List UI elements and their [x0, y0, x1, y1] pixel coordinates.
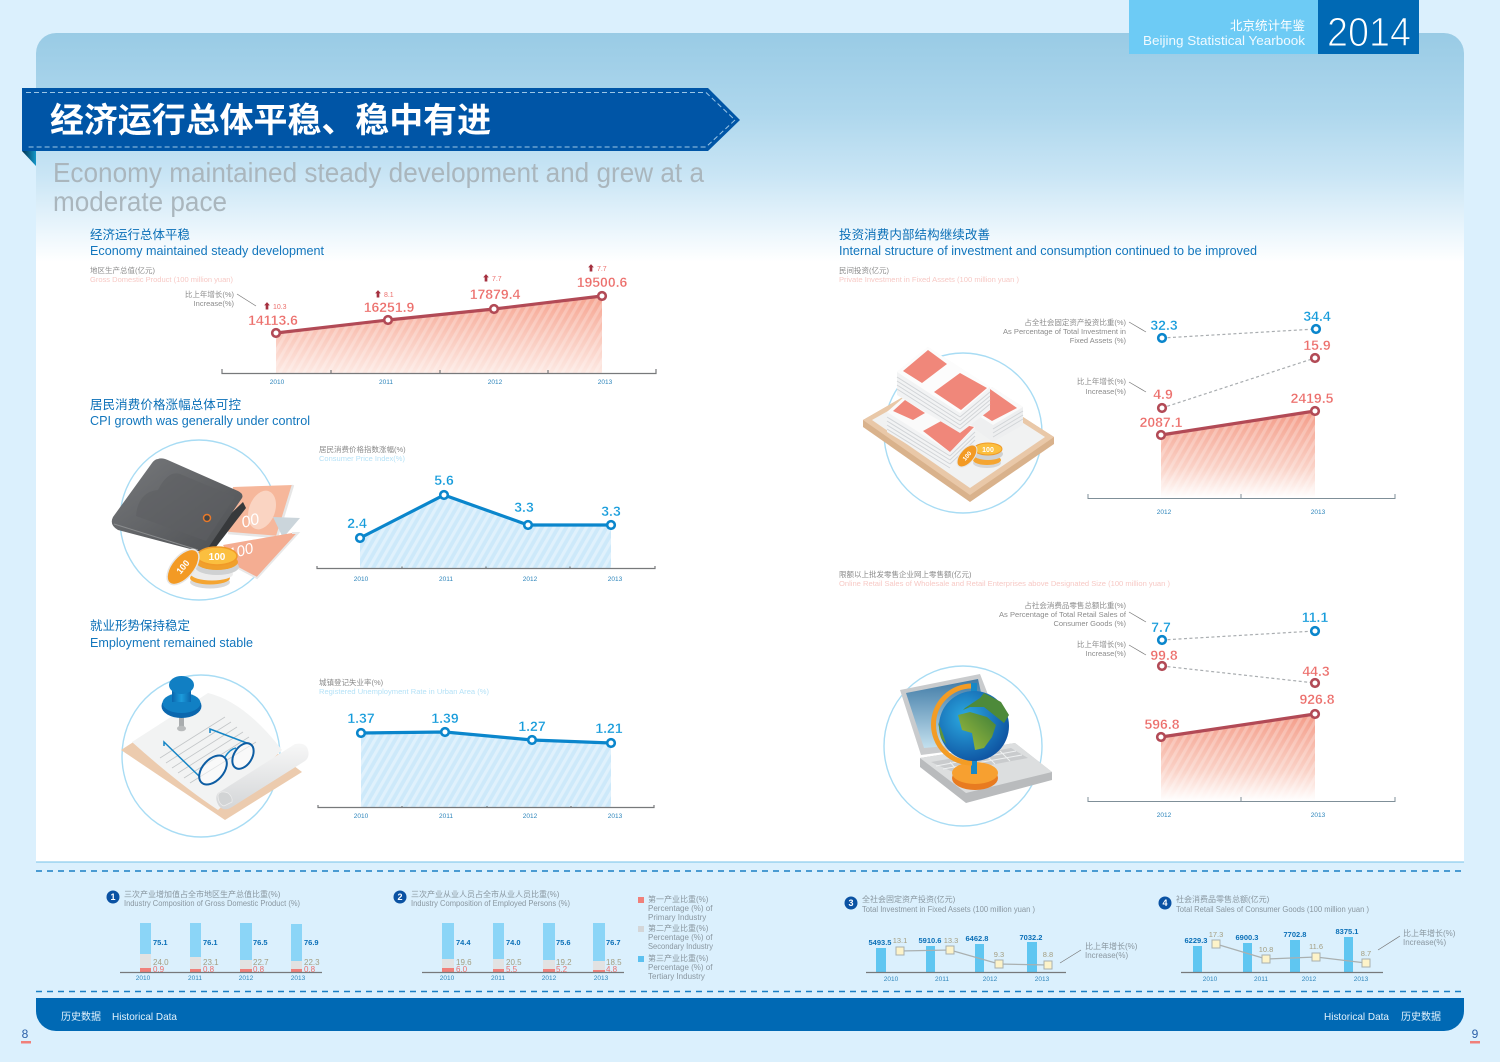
panel: GDP	[90, 227, 656, 386]
area chart: CPI: 2011	[439, 576, 453, 583]
area chart: GDP: 2013	[598, 379, 613, 386]
chart caption: CPI: Consumer Price Index(%)	[319, 454, 405, 463]
chart caption: CPI	[319, 444, 406, 463]
stacked bars: GDP composition: 24.0	[153, 958, 169, 967]
legend: industry composition: Percentage (%) of	[648, 933, 713, 942]
combined chart: private investment: As Percentage of Total Investment in	[1003, 327, 1126, 336]
stacked bars: employment composition: 76.7	[606, 938, 621, 947]
combined chart: private investment: 32.3	[1150, 317, 1178, 333]
footer bar	[36, 998, 1464, 1031]
area chart: CPI: 2013	[608, 576, 623, 583]
combined chart: private investment: 34.4	[1303, 308, 1331, 324]
bar and line chart: fixed assets investment: 5910.6	[919, 936, 941, 945]
bar and line chart: retail sales: Total Retail Sales of Consumer Goods (100 million yuan )	[1176, 905, 1369, 914]
combined chart: private investment: Fixed Assets (%)	[1070, 336, 1127, 345]
stacked bars: employment composition	[394, 889, 624, 982]
bar and line chart: retail sales: 11.6	[1309, 942, 1323, 951]
bar and line chart: fixed assets investment: 2010	[884, 976, 899, 983]
stacked bars: GDP composition: 三次产业增加值占全市地区生产总值比重(%)	[124, 889, 281, 899]
page number 9: 9	[1472, 1027, 1479, 1041]
chart caption: unemployment	[319, 677, 489, 696]
stacked bars: employment composition: 三次产业从业人员占全市从业人员比重(%)	[411, 889, 560, 899]
area chart: GDP	[185, 264, 656, 386]
bar and line chart: retail sales: 2011	[1254, 976, 1268, 983]
panel: online retail sales	[839, 569, 1395, 826]
bar and line chart: fixed assets investment: 7032.2	[1020, 933, 1042, 942]
combined chart: online retail: 11.1	[1302, 609, 1328, 625]
chart caption: online retail: Online Retail Sales of Wholesale and Retail Enterprises above Designated Size (100 million yuan )	[839, 579, 1170, 588]
title banner: 经济运行总体平稳、稳中有进	[50, 102, 491, 140]
legend: industry composition: 第二产业比重(%)	[648, 923, 709, 933]
legend: industry composition: Percentage (%) of	[648, 904, 713, 913]
subtitle: Economy maintained steady development and grew at a	[53, 157, 704, 188]
subtitle: moderate pace	[53, 186, 227, 217]
bar and line chart: fixed assets investment: 2013	[1035, 976, 1050, 983]
icon: banknote bundles on tray	[863, 347, 1054, 513]
chart caption: CPI: 居民消费价格指数涨幅(%)	[319, 444, 406, 454]
bar and line chart: fixed assets investment: 3	[848, 898, 854, 908]
title banner	[22, 88, 740, 166]
heading: GDP: Economy maintained steady development	[90, 243, 324, 258]
bar and line chart: retail sales: 6229.3	[1185, 936, 1207, 945]
area chart: GDP: ⬆ 7.7	[482, 274, 502, 283]
area chart: unemployment: 2010	[354, 813, 369, 820]
footer bar: Historical Data	[112, 1011, 177, 1023]
bar and line chart: fixed assets investment: 9.3	[994, 950, 1004, 959]
yearbook header tab: Beijing Statistical Yearbook	[1143, 33, 1306, 48]
heading: employment: Employment remained stable	[90, 635, 253, 650]
area chart: GDP: 19500.6	[577, 274, 628, 290]
yearbook header tab	[1129, 0, 1419, 55]
area chart: CPI	[317, 472, 655, 583]
icon: pushpin, document and glasses	[121, 675, 309, 837]
area chart: unemployment: 1.27	[518, 718, 546, 734]
bar and line chart: retail sales	[1158, 894, 1456, 983]
heading: employment: 就业形势保持稳定	[90, 618, 190, 633]
area chart: unemployment: 2011	[439, 813, 453, 820]
bar and line chart: fixed assets investment	[844, 894, 1138, 983]
area chart: GDP: 比上年增长(%)	[185, 289, 234, 299]
stacked bars: employment composition: 19.2	[556, 958, 572, 967]
area chart: GDP: ⬆ 8.1	[374, 290, 394, 299]
bar and line chart: retail sales: 2013	[1354, 976, 1369, 983]
area chart: unemployment	[318, 710, 654, 820]
bar and line chart: fixed assets investment: 6462.8	[966, 934, 988, 943]
stacked bars: employment composition: 18.5	[606, 958, 622, 967]
combined chart: private investment: 4.9	[1153, 386, 1173, 402]
stacked bars: employment composition: 75.6	[556, 938, 571, 947]
bar and line chart: retail sales: 8.7	[1361, 949, 1371, 958]
stacked bars: GDP composition: Industry Composition of Gross Domestic Product (%)	[124, 899, 300, 908]
bar and line chart: fixed assets investment: 13.1	[893, 936, 907, 945]
bar and line chart: fixed assets investment: 5493.5	[869, 938, 891, 947]
stacked bars: employment composition: 2	[397, 892, 403, 902]
heading: investment and consumption: Internal structure of investment and consumption continued to be improved	[839, 243, 1257, 258]
bar and line chart: retail sales: 2012	[1302, 976, 1317, 983]
area chart: CPI: 2010	[354, 576, 369, 583]
stacked bars: employment composition: 4.8	[606, 965, 618, 974]
stacked bars: GDP composition: 0.8	[203, 965, 215, 974]
area chart: GDP: 17879.4	[470, 286, 521, 302]
bar and line chart: retail sales: 10.8	[1259, 945, 1273, 954]
footer bar: Historical Data	[1324, 1011, 1389, 1023]
bar and line chart: retail sales: Increase(%)	[1403, 938, 1446, 947]
stacked bars: GDP composition: 2010	[136, 975, 151, 982]
stacked bars: GDP composition: 2013	[291, 975, 306, 982]
stacked bars: employment composition: 20.5	[506, 958, 522, 967]
chart caption: GDP: Gross Domestic Product (100 million yuan)	[90, 275, 233, 284]
stacked bars: employment composition: Industry Composition of Employed Persons (%)	[411, 899, 570, 908]
icon: wallet with banknotes and coins: 100	[209, 552, 226, 563]
chart caption: private investment	[839, 265, 1020, 284]
yearbook header tab: 北京统计年鉴	[1230, 19, 1305, 33]
legend: industry composition: Primary Industry	[648, 913, 706, 922]
combined chart: private investment: Increase(%)	[1086, 387, 1126, 396]
area chart: unemployment: 1.37	[347, 710, 375, 726]
subtitle	[53, 157, 704, 217]
icon: laptop with globe	[884, 666, 1052, 826]
stacked bars: GDP composition: 75.1	[153, 938, 168, 947]
stacked bars: GDP composition: 22.3	[304, 958, 320, 967]
icon: wallet with banknotes and coins: 00	[240, 511, 261, 532]
heading: employment	[90, 618, 253, 650]
icon: wallet with banknotes and coins: 100	[227, 540, 256, 563]
legend: industry composition	[638, 894, 713, 981]
stacked bars: employment composition: 74.0	[506, 938, 521, 947]
bar and line chart: fixed assets investment: Increase(%)	[1085, 951, 1128, 960]
combined chart: online retail	[999, 600, 1395, 819]
combined chart: private investment: 2013	[1311, 509, 1326, 516]
combined chart: private investment: 比上年增长(%)	[1077, 376, 1126, 386]
stacked bars: GDP composition	[106, 889, 322, 982]
combined chart: online retail: 926.8	[1299, 691, 1335, 707]
panel: CPI	[90, 397, 655, 600]
combined chart: online retail: 2012	[1157, 812, 1172, 819]
icon: banknote bundles on tray: 100	[962, 450, 974, 462]
chart caption: online retail	[839, 569, 1170, 588]
stacked bars: GDP composition: 0.8	[304, 965, 316, 974]
combined chart: online retail: 7.7	[1151, 619, 1171, 635]
yearbook header tab: 2014	[1327, 9, 1411, 55]
stacked bars: GDP composition: 76.1	[203, 938, 218, 947]
stacked bars: GDP composition: 76.9	[304, 938, 319, 947]
panel: private investment	[839, 227, 1395, 516]
bar and line chart: fixed assets investment: 比上年增长(%)	[1085, 941, 1138, 951]
chart caption: online retail: 限额以上批发零售企业网上零售额(亿元)	[839, 569, 972, 579]
panel: employment	[90, 618, 654, 837]
bar and line chart: retail sales: 7702.8	[1284, 930, 1306, 939]
bar and line chart: retail sales: 4	[1162, 898, 1168, 908]
chart caption: unemployment: 城镇登记失业率(%)	[319, 677, 384, 687]
combined chart: online retail: 44.3	[1302, 663, 1330, 679]
bar and line chart: retail sales: 比上年增长(%)	[1403, 928, 1456, 938]
bar and line chart: fixed assets investment: Total Investment in Fixed Assets (100 million yuan )	[862, 905, 1035, 914]
area chart: GDP: 16251.9	[364, 299, 415, 315]
area chart: GDP: Increase(%)	[194, 299, 234, 308]
area chart: unemployment: 2012	[523, 813, 538, 820]
heading: CPI	[90, 397, 310, 428]
bar and line chart: fixed assets investment: 全社会固定资产投资(亿元)	[862, 894, 956, 904]
bar and line chart: retail sales: 8375.1	[1336, 927, 1358, 936]
stacked bars: employment composition: 2012	[542, 975, 557, 982]
bar and line chart: retail sales: 17.3	[1209, 930, 1223, 939]
combined chart: private investment: 15.9	[1303, 337, 1331, 353]
heading: CPI: 居民消费价格涨幅总体可控	[90, 397, 241, 412]
stacked bars: GDP composition: 22.7	[253, 958, 269, 967]
stacked bars: GDP composition: 0.8	[253, 965, 265, 974]
area chart: GDP: 2012	[488, 379, 503, 386]
legend: industry composition: Percentage (%) of	[648, 963, 713, 972]
stacked bars: employment composition: 74.4	[456, 938, 471, 947]
combined chart: private investment: 占全社会固定资产投资比重(%)	[1024, 317, 1126, 327]
bar and line chart: retail sales: 社会消费品零售总额(亿元)	[1176, 894, 1270, 904]
page number 8: 8	[22, 1027, 29, 1041]
footer bar: 历史数据	[61, 1010, 101, 1023]
combined chart: online retail: 比上年增长(%)	[1077, 639, 1126, 649]
stacked bars: GDP composition: 23.1	[203, 958, 219, 967]
bar and line chart: fixed assets investment: 13.3	[944, 936, 958, 945]
combined chart: online retail: 99.8	[1150, 647, 1178, 663]
stacked bars: GDP composition: 2011	[188, 975, 202, 982]
stacked bars: GDP composition: 76.5	[253, 938, 268, 947]
combined chart: online retail: 占社会消费品零售总额比重(%)	[1024, 600, 1126, 610]
heading: GDP: 经济运行总体平稳	[90, 227, 190, 242]
area chart: GDP: 14113.6	[248, 312, 298, 328]
chart caption: GDP	[90, 265, 233, 284]
bar and line chart: retail sales: 2010	[1203, 976, 1218, 983]
stacked bars: employment composition: 5.5	[506, 965, 518, 974]
legend: industry composition: Secondary Industry	[648, 942, 713, 951]
combined chart: private investment	[1003, 308, 1395, 516]
chart caption: GDP: 地区生产总值(亿元)	[90, 265, 155, 275]
bar and line chart: retail sales: 6900.3	[1236, 933, 1258, 942]
area chart: GDP: 2010	[270, 379, 285, 386]
combined chart: private investment: 2419.5	[1291, 390, 1334, 406]
footer bar: 历史数据	[1401, 1010, 1441, 1023]
area chart: GDP: ⬆ 7.7	[587, 264, 607, 273]
stacked bars: employment composition: 2013	[594, 975, 609, 982]
area chart: CPI: 2012	[523, 576, 538, 583]
combined chart: online retail: 2013	[1311, 812, 1326, 819]
area chart: CPI: 3.3	[601, 503, 621, 519]
combined chart: private investment: 2012	[1157, 509, 1172, 516]
icon: wallet with banknotes and coins	[112, 440, 300, 600]
stacked bars: employment composition: 2011	[491, 975, 505, 982]
bar and line chart: fixed assets investment: 2012	[983, 976, 998, 983]
area chart: unemployment: 1.21	[595, 720, 623, 736]
combined chart: online retail: 596.8	[1144, 716, 1180, 732]
legend: industry composition: Tertiary Industry	[648, 972, 705, 981]
area chart: unemployment: 2013	[608, 813, 623, 820]
area chart: CPI: 2.4	[347, 515, 367, 531]
area chart: CPI: 5.6	[434, 472, 454, 488]
page number 8	[21, 1027, 31, 1044]
chart caption: private investment: Private Investment in Fixed Assets (100 million yuan )	[839, 275, 1020, 284]
combined chart: online retail: Consumer Goods (%)	[1053, 619, 1126, 628]
icon: wallet with banknotes and coins: 100	[174, 558, 192, 576]
page number 9	[1470, 1027, 1480, 1044]
heading: investment and consumption: 投资消费内部结构继续改善	[839, 227, 990, 242]
stacked bars: GDP composition: 1	[110, 892, 116, 902]
heading: CPI: CPI growth was generally under control	[90, 413, 310, 428]
icon: banknote bundles on tray: 100	[982, 447, 994, 454]
combined chart: online retail: Increase(%)	[1086, 649, 1126, 658]
combined chart: online retail: As Percentage of Total Retail Sales of	[999, 610, 1127, 619]
chart caption: unemployment: Registered Unemployment Rate in Urban Area (%)	[319, 687, 489, 696]
stacked bars: employment composition: 6.0	[456, 965, 468, 974]
stacked bars: employment composition: 5.2	[556, 965, 568, 974]
stacked bars: GDP composition: 0.9	[153, 965, 165, 974]
stacked bars: employment composition: 2010	[440, 975, 455, 982]
bar and line chart: fixed assets investment: 2011	[935, 976, 949, 983]
stacked bars: employment composition: 19.6	[456, 958, 472, 967]
legend: industry composition: 第一产业比重(%)	[648, 894, 709, 904]
area chart: unemployment: 1.39	[431, 710, 459, 726]
area chart: GDP: 2011	[379, 379, 393, 386]
area chart: GDP: ⬆ 10.3	[263, 302, 287, 311]
combined chart: private investment: 2087.1	[1140, 414, 1183, 430]
heading: GDP	[90, 227, 324, 258]
legend: industry composition: 第三产业比重(%)	[648, 953, 709, 963]
chart caption: private investment: 民间投资(亿元)	[839, 265, 889, 275]
heading: investment and consumption	[839, 227, 1257, 258]
bar and line chart: fixed assets investment: 8.8	[1043, 950, 1053, 959]
area chart: CPI: 3.3	[514, 499, 534, 515]
stacked bars: GDP composition: 2012	[239, 975, 254, 982]
